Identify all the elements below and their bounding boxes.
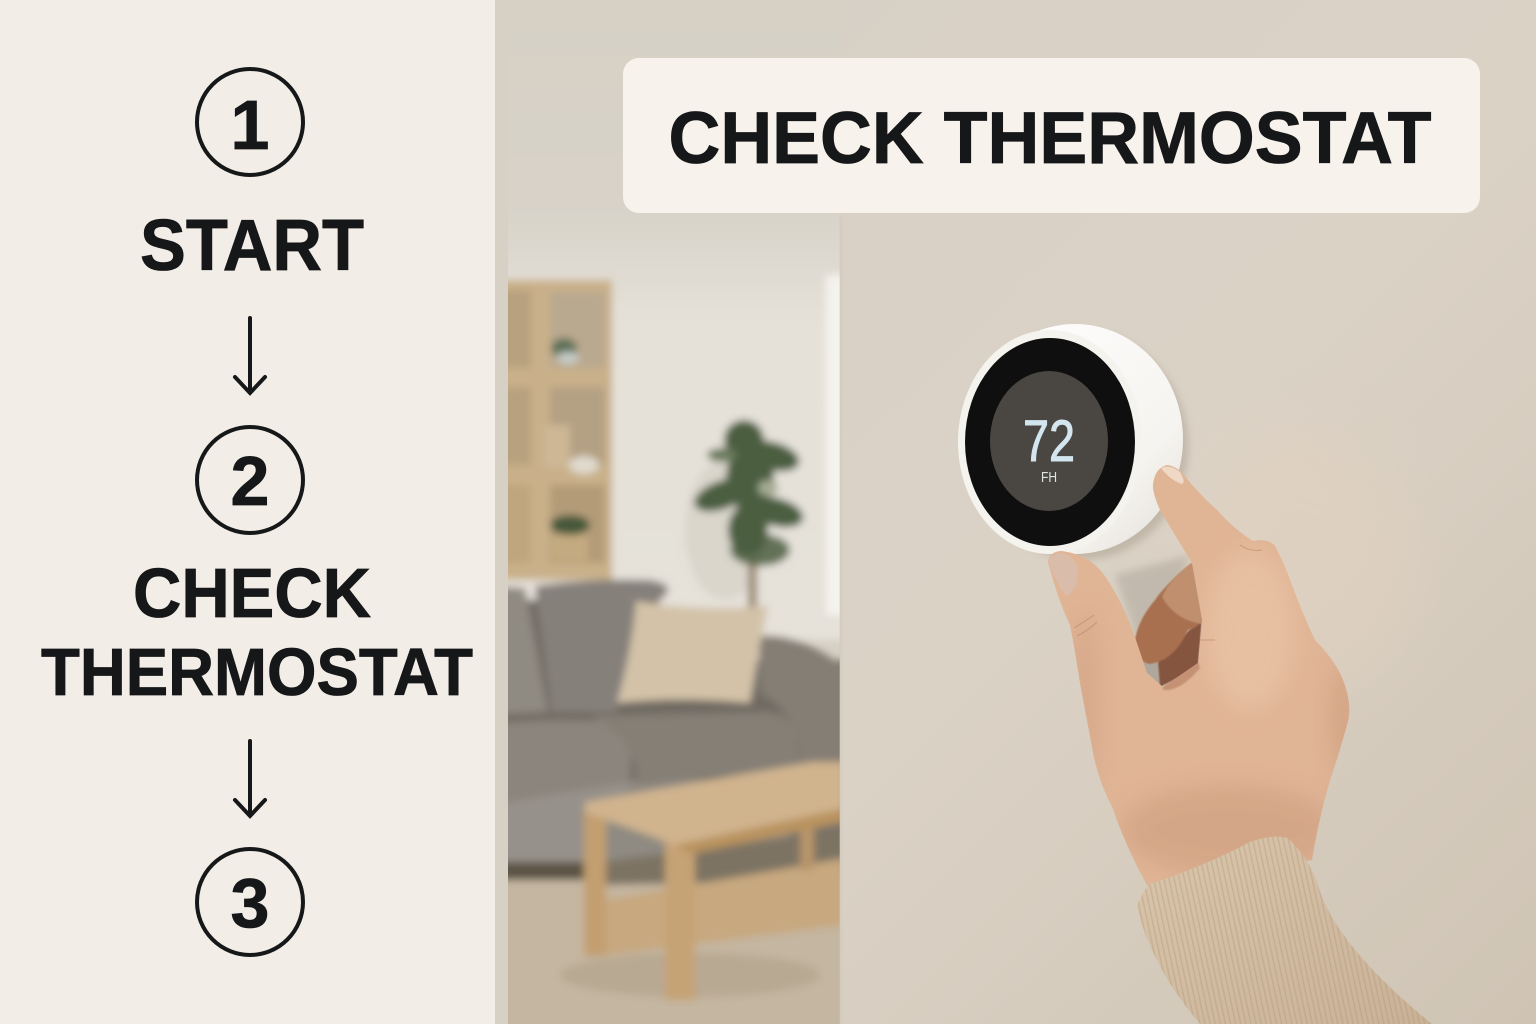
index fingernail <box>1161 467 1184 484</box>
arrow 1 to 2 <box>235 318 265 393</box>
step 2 label: THERMOSTAT <box>41 635 473 710</box>
room doorway edge <box>840 215 842 1024</box>
arrow 2 to 3 <box>235 741 265 816</box>
thermostat black screen <box>965 338 1135 546</box>
lower room backing <box>748 656 840 842</box>
step 2 badge: 2 <box>231 442 269 520</box>
thumbnail <box>1049 553 1078 596</box>
thermostat body <box>967 324 1183 554</box>
floor <box>508 880 840 1024</box>
coffee table <box>560 762 845 1000</box>
step 3 badge <box>197 849 303 955</box>
temperature reading: 72 <box>1023 409 1075 474</box>
step 3 badge: 3 <box>231 864 269 942</box>
finger creases <box>1074 545 1262 640</box>
room back wall <box>508 242 840 644</box>
wall background <box>495 0 1536 1024</box>
thermostat front ring <box>958 330 1142 554</box>
soft wall shadow above curled fingers <box>1115 555 1190 650</box>
step 2 label <box>41 554 473 710</box>
unit label: FH <box>1041 469 1057 486</box>
title banner: CHECK THERMOSTAT <box>668 98 1432 179</box>
thermostat shadow <box>976 332 1188 560</box>
step 1 label: START <box>140 206 364 286</box>
third curled finger <box>1158 618 1202 687</box>
second curled finger <box>1135 563 1202 664</box>
gap shadow below curled fingers <box>1135 640 1162 690</box>
bright wall strip <box>824 273 840 616</box>
step 1 badge: 1 <box>231 86 269 164</box>
hand turning thermostat <box>1048 465 1432 1024</box>
potted plant <box>690 413 807 620</box>
step 2 label: CHECK <box>133 554 371 632</box>
thermostat <box>958 324 1188 560</box>
sweater sleeve <box>1137 837 1432 1024</box>
step 1 badge <box>197 69 303 175</box>
blurred living room photo <box>508 242 840 1024</box>
throw pillow <box>617 601 768 703</box>
thermostat inner display <box>990 371 1108 511</box>
first curled finger <box>1162 563 1203 624</box>
hand shading <box>1071 550 1359 875</box>
sofa <box>490 580 845 885</box>
plant shadow on wall <box>686 461 748 598</box>
palm, thumb and index finger <box>1048 465 1349 887</box>
left steps panel <box>0 0 495 1024</box>
title banner <box>623 58 1480 213</box>
bookshelf <box>495 280 612 580</box>
step 2 badge <box>197 427 303 533</box>
